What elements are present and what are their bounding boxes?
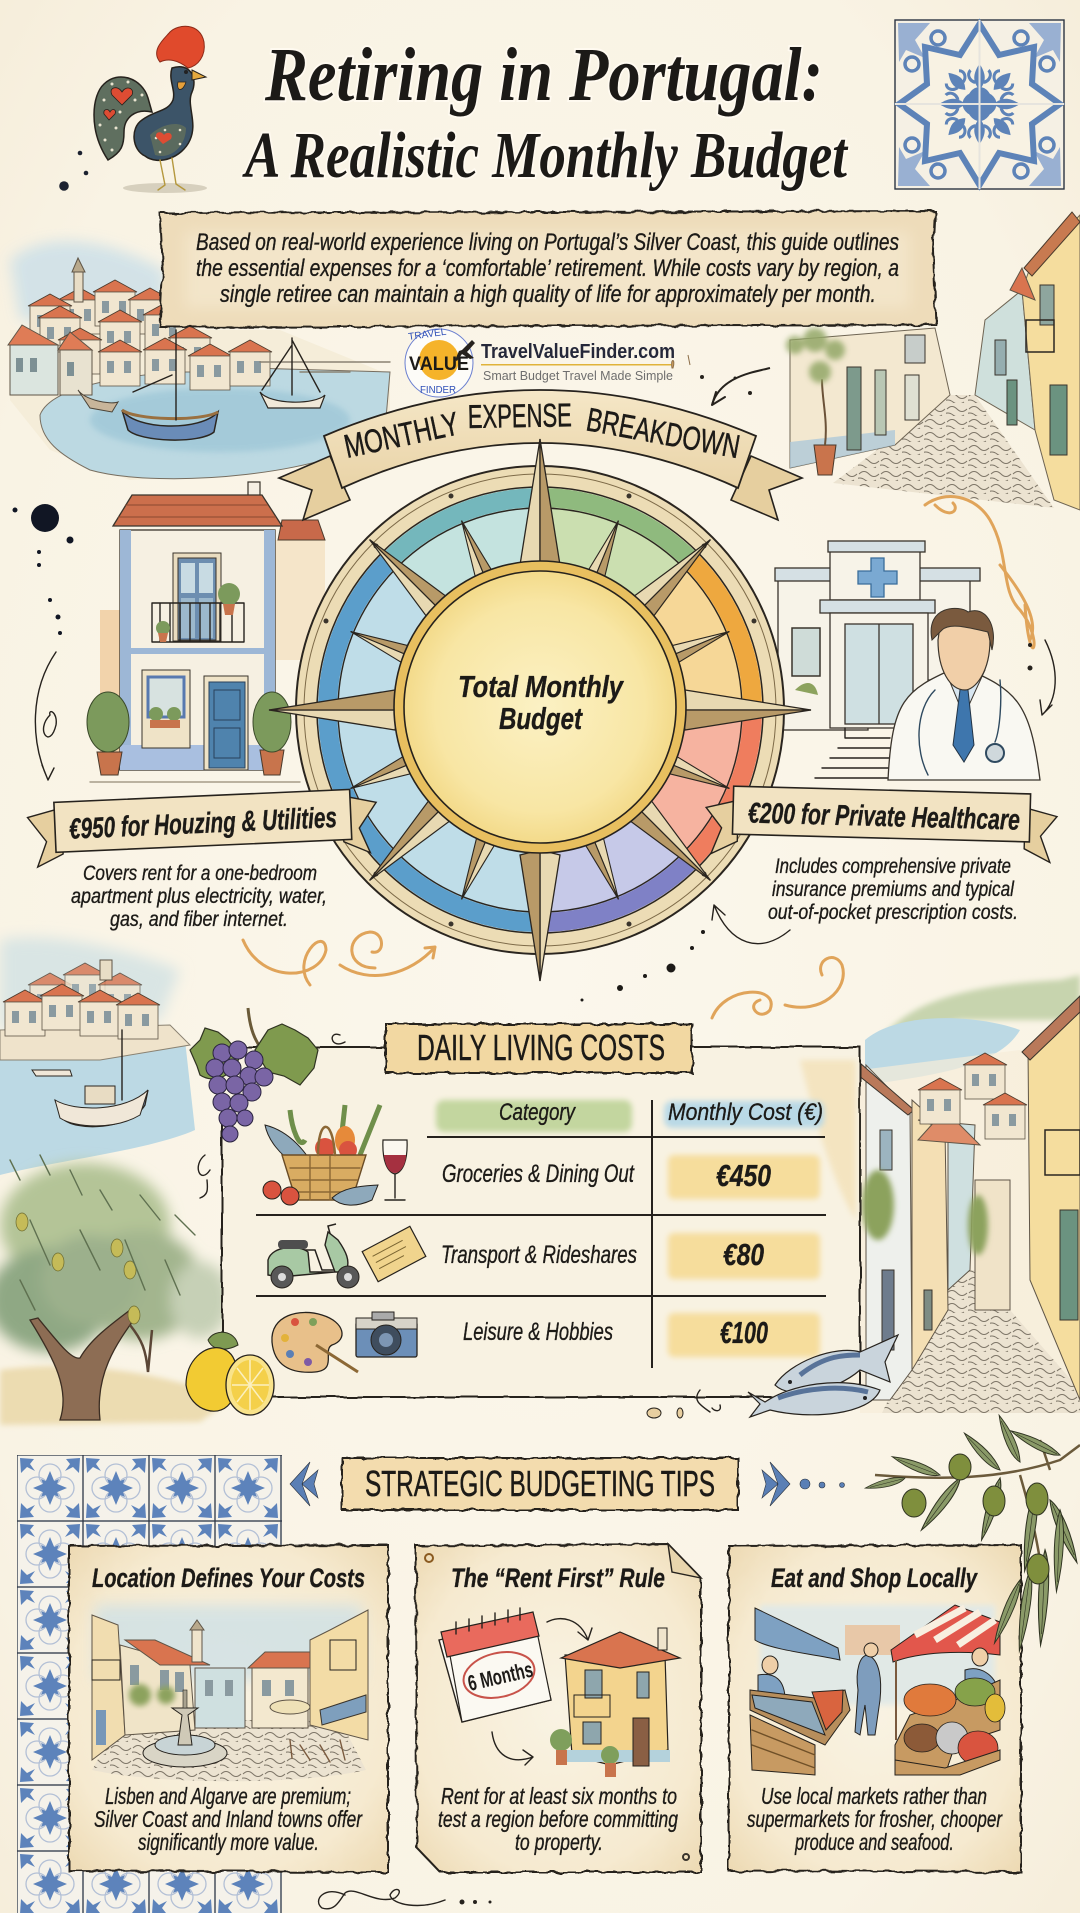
compass star points bbox=[347, 517, 733, 903]
compass long points and centre bbox=[269, 439, 811, 981]
label: daily living costs: DAILY LIVING COSTS bbox=[417, 1027, 665, 1068]
logo: TravelValueFinder bbox=[405, 327, 675, 397]
label: strategic budgeting tips bbox=[342, 1458, 738, 1510]
banner: monthly expense breakdown bbox=[279, 390, 802, 520]
logo: TravelValueFinder: TRAVEL bbox=[408, 327, 447, 343]
panel: location defines your costs: Location Defines Your Costs bbox=[92, 1563, 365, 1593]
olive branch bbox=[864, 1413, 1080, 1645]
panel: the rent first rule: Rent for at least six months to bbox=[441, 1783, 677, 1809]
olive sprig over third panel bbox=[989, 1554, 1049, 1651]
compass long points and centre: Total Monthly bbox=[458, 669, 624, 704]
icon: azulejo tile bbox=[895, 20, 1064, 189]
arrow left of house bbox=[35, 652, 56, 780]
panel: eat and shop locally: produce and seafood. bbox=[794, 1829, 954, 1855]
text: housing description: gas, and fiber internet. bbox=[110, 908, 288, 931]
text: housing description bbox=[71, 862, 327, 931]
panel: daily living costs table bbox=[222, 1047, 860, 1397]
ink dots by rooster bbox=[59, 151, 88, 191]
icon: scooter and ticket bbox=[268, 1224, 426, 1288]
logo: TravelValueFinder: VALUE bbox=[409, 354, 469, 375]
street and bay scene middle right bbox=[858, 975, 1080, 1413]
panel: location defines your costs: significantly more value. bbox=[138, 1829, 319, 1855]
bottom flourish bbox=[319, 1889, 492, 1909]
arrow right of clinic bbox=[1028, 640, 1055, 715]
orange swirl above table bbox=[712, 958, 843, 1018]
label: daily living costs bbox=[386, 1024, 692, 1073]
panel: daily living costs table: Groceries & Dining Out bbox=[442, 1160, 635, 1188]
title: Retiring in Portugal: bbox=[264, 33, 823, 117]
olive tree bbox=[0, 1155, 230, 1425]
icon: grapes bbox=[190, 1008, 345, 1198]
ribbon: private healthcare bbox=[705, 785, 1058, 863]
label: strategic budgeting tips: STRATEGIC BUDGETING TIPS bbox=[365, 1463, 715, 1504]
panel: daily living costs table: Monthly Cost (€) bbox=[668, 1099, 823, 1126]
logo: TravelValueFinder: TravelValueFinder.com bbox=[481, 341, 675, 363]
title: A Realistic Monthly Budget bbox=[242, 119, 848, 192]
house illustration bbox=[87, 482, 325, 782]
banner: monthly expense breakdown: MONTHLY bbox=[341, 405, 462, 465]
text: healthcare description: out-of-pocket prescription costs. bbox=[768, 901, 1018, 924]
panel: the rent first rule: The “Rent First” Rule bbox=[451, 1563, 665, 1593]
clinic illustration bbox=[775, 541, 980, 778]
title bbox=[242, 33, 848, 192]
harbor scene middle left bbox=[0, 937, 195, 1175]
panel: daily living costs table: €450 bbox=[716, 1158, 771, 1193]
icon: palette and camera bbox=[272, 1312, 417, 1372]
ribbon: housing and utilities: €950 for Houzing & Utilities bbox=[68, 802, 338, 846]
harbor scene top left bbox=[8, 241, 390, 480]
logo: TravelValueFinder: FINDER bbox=[420, 385, 456, 396]
panel: eat and shop locally bbox=[729, 1545, 1021, 1872]
header column washes bbox=[436, 1100, 824, 1357]
compass long points and centre: Budget bbox=[499, 701, 583, 736]
panel: daily living costs table: €80 bbox=[723, 1237, 764, 1272]
intro banner: Based on real-world experience living on Portugal’s Silver Coast, this guide outlines bbox=[196, 229, 899, 256]
rim rivets bbox=[306, 476, 774, 944]
text: healthcare description: insurance premiums and typical bbox=[772, 878, 1015, 901]
orange swirl arrow under wheel bbox=[243, 932, 435, 985]
pale wedges bbox=[297, 467, 783, 953]
panel: the rent first rule: test a region before committing bbox=[438, 1806, 678, 1832]
small house bbox=[550, 1628, 680, 1777]
icon: lemons bbox=[186, 1332, 274, 1415]
text: healthcare description bbox=[768, 855, 1018, 924]
calendar icon: 6 Months bbox=[465, 1657, 535, 1696]
panel: location defines your costs bbox=[69, 1545, 388, 1872]
panel: daily living costs table: Transport & Rideshares bbox=[441, 1241, 637, 1269]
panel: the rent first rule bbox=[416, 1544, 701, 1872]
panel: daily living costs table: Category bbox=[499, 1099, 577, 1126]
orange flourish top right bbox=[925, 497, 1034, 648]
text: housing description: apartment plus electricity, water, bbox=[71, 885, 327, 908]
panel: eat and shop locally: Eat and Shop Locally bbox=[771, 1563, 978, 1593]
logo: TravelValueFinder: Smart Budget Travel Made Simple bbox=[483, 368, 673, 383]
banner: monthly expense breakdown: EXPENSE bbox=[467, 396, 572, 435]
street scene top right bbox=[672, 212, 1080, 510]
scene: market bbox=[750, 1605, 1005, 1775]
doctor illustration bbox=[888, 608, 1040, 780]
panel: the rent first rule: to property. bbox=[515, 1829, 603, 1855]
intro banner bbox=[160, 211, 936, 327]
intro banner: single retiree can maintain a high quality of life for approximately per month. bbox=[220, 281, 876, 308]
text: healthcare description: Includes comprehensive private bbox=[775, 855, 1011, 878]
panel: daily living costs table: €100 bbox=[720, 1315, 768, 1350]
scene: town plaza bbox=[92, 1605, 368, 1781]
ornaments beside tips label bbox=[290, 1462, 844, 1506]
panel: daily living costs table: Leisure & Hobbies bbox=[463, 1318, 613, 1346]
arrow and dots near healthcare text bbox=[580, 905, 790, 1002]
ink blot left bbox=[12, 504, 74, 635]
icon: sardines bbox=[647, 1335, 898, 1418]
panel: location defines your costs: Silver Coast and Inland towns offer bbox=[94, 1806, 363, 1832]
azulejo tile border bbox=[17, 1455, 282, 1913]
ribbon: housing and utilities bbox=[27, 788, 378, 867]
arrows bbox=[492, 1619, 592, 1765]
rooster illustration bbox=[94, 26, 207, 193]
icon: food basket and wine bbox=[263, 1105, 407, 1205]
intro banner: the essential expenses for a ‘comfortable’ retirement. While costs vary by region, a bbox=[196, 255, 899, 282]
panel: eat and shop locally: Use local markets rather than bbox=[761, 1783, 987, 1809]
calendar icon bbox=[439, 1608, 551, 1722]
dark colour ring segments bbox=[240, 410, 840, 1010]
banner: monthly expense breakdown: BREAKDOWN bbox=[584, 401, 743, 465]
text: housing description: Covers rent for a one-bedroom bbox=[83, 862, 317, 885]
compass wheel bbox=[240, 410, 840, 1010]
panel: location defines your costs: Lisben and Algarve are premium; bbox=[105, 1783, 351, 1809]
